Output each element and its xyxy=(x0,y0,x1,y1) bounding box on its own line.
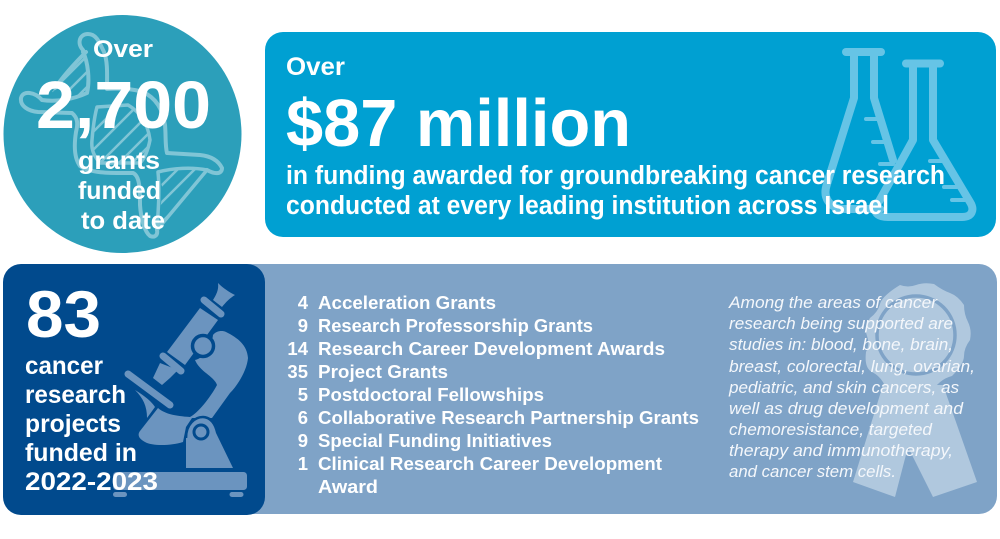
list: grant counts: 4 xyxy=(298,292,309,313)
heading: over: Over xyxy=(286,53,345,81)
text: cancer research projects funded xyxy=(25,352,158,496)
list: grant counts: 35 xyxy=(287,361,308,382)
panel: funding xyxy=(265,32,996,237)
icon: ribbon rosette xyxy=(853,283,977,497)
list: grant counts: Postdoctoral Fellowships xyxy=(318,384,544,405)
list: grant counts: 1 xyxy=(298,453,308,474)
text: research areas: well as drug development and xyxy=(729,399,964,418)
text: research areas: pediatric, and skin cancers, as xyxy=(728,378,960,397)
text: research areas: studies in: blood, bone, brain, xyxy=(729,335,953,354)
icon: microscope xyxy=(113,283,248,497)
text: cancer research projects funded: cancer xyxy=(25,352,103,380)
panel: projects funded xyxy=(3,264,265,515)
list: grant counts: Project Grants xyxy=(318,361,448,382)
list: grant counts xyxy=(287,292,699,497)
list: grant counts: 6 xyxy=(298,407,308,428)
list: grant counts: 5 xyxy=(298,384,308,405)
icon: flasks xyxy=(825,52,972,217)
heading: over: Over xyxy=(93,36,153,63)
panel: grant list and areas xyxy=(230,264,997,514)
text: cancer research projects funded: research xyxy=(25,381,126,409)
list: grant counts: Award xyxy=(318,476,378,497)
list: grant counts: Collaborative Research Partnership Grants xyxy=(318,407,699,428)
text: grants funded to date: to date xyxy=(81,207,165,235)
text: research areas: breast, colorectal, lung, ovarian, xyxy=(729,357,975,376)
icon: dna helix xyxy=(21,34,222,237)
text: research areas: research being supported are xyxy=(729,314,953,333)
text: cancer research projects funded: 2022-2023 xyxy=(25,468,158,496)
text: research areas xyxy=(728,293,975,481)
big number: 83: 83 xyxy=(26,277,101,351)
list: grant counts: Research Career Development Awards xyxy=(318,338,665,359)
text: grants funded to date xyxy=(78,147,165,235)
text: cancer research projects funded: projects xyxy=(25,410,121,438)
text: grants funded to date: grants xyxy=(78,147,160,175)
text: research areas: therapy and immunotherapy, xyxy=(729,441,953,460)
list: grant counts: Acceleration Grants xyxy=(318,292,496,313)
list: grant counts: Special Funding Initiatives xyxy=(318,430,552,451)
text: funding description xyxy=(286,162,945,220)
list: grant counts: 9 xyxy=(298,315,308,336)
text: research areas: Among the areas of cancer xyxy=(728,293,938,312)
text: research areas: chemoresistance, targeted xyxy=(729,420,933,439)
list: grant counts: Clinical Research Career Development xyxy=(318,453,662,474)
big number: $87 million: $87 million xyxy=(286,86,631,161)
list: grant counts: 9 xyxy=(298,430,308,451)
panel: grants circle xyxy=(4,15,242,253)
text: cancer research projects funded: funded in xyxy=(25,439,137,467)
list: grant counts: Research Professorship Grants xyxy=(318,315,593,336)
text: grants funded to date: funded xyxy=(78,177,161,205)
text: funding description: conducted at every leading institution across Israel xyxy=(286,192,889,220)
text: funding description: in funding awarded for groundbreaking cancer research xyxy=(286,162,945,190)
list: grant counts: 14 xyxy=(287,338,309,359)
text: research areas: and cancer stem cells. xyxy=(729,462,896,481)
big number: 2,700: 2,700 xyxy=(36,68,211,143)
